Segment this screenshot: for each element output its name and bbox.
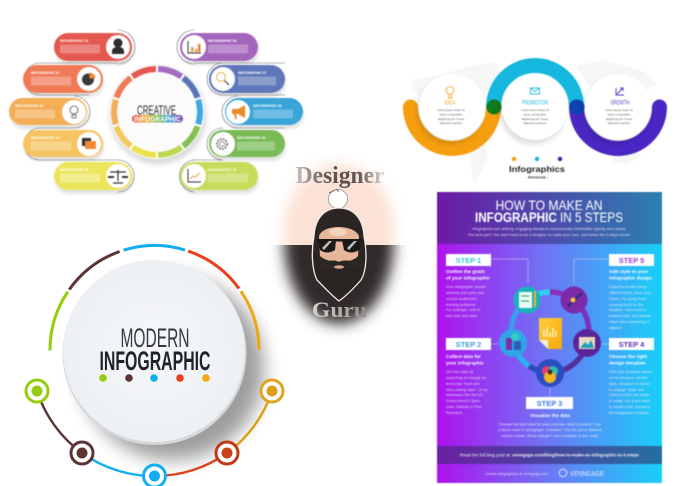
step 4 icon: [573, 329, 601, 357]
node: blue: [144, 465, 166, 486]
node: brown: [71, 442, 93, 464]
icon: bun: [328, 189, 348, 208]
step 5: Experiment with using: [609, 285, 646, 289]
step 2: Get free data by: [446, 370, 473, 374]
panel: ideas promotion growth: [410, 60, 660, 184]
intro text: Infographics use striking, engaging visuals to communicate information quickly and clearly.: [472, 226, 626, 231]
legend dots: [512, 157, 562, 161]
step 2 icon: [499, 329, 527, 357]
step 2: Research.: [446, 411, 463, 415]
upper arcs: [9, 204, 300, 486]
step 2: terms like "food and: [446, 382, 479, 386]
card: growth: dignissim pretium: [608, 121, 631, 125]
pill 07: [209, 65, 285, 93]
step 3: Visualize the data: [530, 413, 570, 419]
heading: guru: Guru: [312, 297, 367, 322]
step 2: Government's Open: [446, 399, 480, 403]
step 5: colors. Try using more: [609, 297, 646, 301]
ring shadow: [110, 68, 206, 164]
junction dots: [486, 100, 584, 114]
step 1: pair food and wine.: [446, 314, 478, 318]
step 4: to create a list, choose a: [609, 405, 651, 409]
title: infographic: INFOGRAPHIC: [100, 346, 210, 376]
pill 03: [9, 98, 87, 125]
card: promotion: Lorem ipsum dolor sit: [521, 108, 549, 112]
card: idea: Lorem ipsum dolor sit: [437, 108, 465, 112]
forehead highlight: [329, 228, 347, 236]
icon: scales: [108, 170, 128, 183]
pill 01: [54, 33, 132, 61]
step 2: databases like the US: [446, 393, 483, 397]
step 1: Outline the goals: [446, 269, 485, 275]
step 4: to adapt. So, if you want: [609, 399, 651, 403]
step 2: wine pairing data". Or try: [446, 388, 488, 392]
pill 06: [180, 33, 258, 61]
node: green: [26, 380, 48, 402]
heading: infographics elements: - Elements -: [526, 174, 549, 180]
disc: [62, 261, 246, 445]
icon: envelope: [530, 88, 540, 94]
step 5: Add style to your: [609, 269, 648, 275]
peach backdrop: [278, 159, 400, 245]
segmented color ring: [97, 52, 217, 172]
title: [475, 197, 623, 225]
connector lines: [24, 30, 285, 192]
icon: pie chart: [82, 72, 96, 86]
step 3: Choose the best chart for your purpose. Want to inform? Use: [499, 422, 601, 426]
icon: bearded head: [312, 208, 366, 301]
pill 08: INFOGRAPHIC 08: [253, 104, 282, 108]
card: promotion: PROMOTION: [522, 100, 548, 106]
step 2: STEP 2: [456, 340, 481, 349]
title: INFOGRAPHIC IN 5 STEPS: [475, 209, 623, 225]
step 4: Choose the right: [609, 354, 648, 360]
step 5: aligned.: [609, 326, 622, 330]
step 5: STEP 5: [619, 256, 644, 265]
step 4: style. Structure is harder: [609, 382, 651, 386]
step 5: different fonts, icons and: [609, 291, 650, 295]
pill 04: [23, 130, 103, 157]
step 3: a donut chart or pictograph. Compare? Try bar, pie or stacked: [498, 428, 602, 432]
step 1: Your infographic should: [446, 285, 486, 289]
disc shadow: [80, 276, 264, 460]
blue arc: [494, 66, 576, 107]
pill 10: INFOGRAPHIC 10: [208, 168, 237, 172]
card: growth: Lorem ipsum dolor sit: [605, 108, 633, 112]
step 4: to change. Style, like: [609, 388, 644, 392]
icon: speech bubbles: [82, 138, 96, 149]
sunglasses: [317, 239, 363, 252]
pill 02: [23, 65, 103, 93]
venngage credit: [485, 469, 604, 478]
card: growth: GROWTH: [610, 100, 630, 106]
pill 10: [180, 162, 258, 190]
title: HOW TO MAKE AN: [496, 197, 602, 213]
step 1: For example: how to: [446, 308, 480, 312]
step 5: infographic design: [609, 276, 652, 282]
rainbow label: INFOGRAPHIC: [134, 114, 182, 124]
heading: infographics elements: [509, 164, 565, 180]
pill 09: INFOGRAPHIC 09: [237, 136, 266, 140]
intro text: [468, 226, 630, 237]
icon: light bulb: [70, 106, 78, 118]
card: growth: [585, 74, 651, 140]
step 5: bulleted lists. And always: [609, 314, 651, 318]
document icon: [539, 318, 562, 349]
step 4: list infographic template.: [609, 411, 650, 415]
node: orange: [261, 380, 283, 402]
step 5: make sure everything is: [609, 320, 649, 324]
panel: modern infographic: [9, 204, 300, 486]
card: promotion: adipiscing elit. Fusce: [522, 117, 549, 121]
card: promotion: [502, 74, 568, 140]
circle shadows: [417, 78, 649, 144]
step 1: of your infographic: [446, 276, 490, 282]
background: [437, 192, 662, 483]
card: idea: dignissim pretium: [440, 121, 463, 125]
step 5 icon: [560, 286, 588, 314]
step 2: Data, Statista or Pew: [446, 405, 482, 409]
pill 05: INFOGRAPHIC 05: [60, 168, 89, 172]
step 2: Collect data for: [446, 354, 481, 360]
step 3: STEP 3: [537, 399, 562, 408]
card: promotion: dignissim pretium: [524, 121, 547, 125]
title: modern: MODERN: [120, 323, 190, 353]
step 5: unusual fonts for the: [609, 303, 643, 307]
icon: growth chart: [616, 88, 624, 95]
face: [319, 227, 359, 262]
card: promotion: amet, consectetur: [524, 112, 547, 116]
title: creative: CREATIVE: [137, 102, 176, 118]
pill 03: INFOGRAPHIC 03: [15, 104, 44, 108]
venngage credit: Create infographics at venngage.com: [485, 472, 548, 476]
header band: [437, 192, 662, 244]
disc top: [63, 260, 245, 442]
step 5: [609, 254, 654, 330]
ring: [511, 292, 589, 373]
step 3 icon: [536, 359, 564, 387]
pill 05: [54, 162, 132, 190]
pill shadows: [10, 37, 304, 194]
connectors: [491, 259, 609, 397]
pill 06: INFOGRAPHIC 06: [208, 39, 237, 43]
venngage credit: VENNGAGE: [570, 471, 604, 478]
panel: designer guru logo: [283, 156, 395, 324]
icon: bulb: [446, 87, 454, 98]
step 3: [498, 397, 602, 438]
world map: [412, 60, 657, 184]
step 4: design template: [609, 360, 646, 366]
color dots: [99, 374, 210, 382]
card: growth: amet, consectetur: [608, 112, 631, 116]
intro text: The best part? You don't need to be a designer to make your own. Just follow the 5 steps below:: [468, 232, 630, 237]
icon: megaphone: [232, 105, 245, 119]
step 4: STEP 4: [619, 340, 645, 349]
step 2: [446, 338, 491, 415]
panel: creative infographic: [9, 30, 304, 194]
card: idea: [419, 74, 485, 140]
pill 08: [225, 98, 303, 125]
step 2: searching on Google for: [446, 376, 487, 380]
heading: designer: Designer: [296, 163, 385, 189]
heading: infographics elements: Infographics: [509, 164, 565, 174]
icon: magnifier: [216, 72, 229, 85]
purple arc: [576, 107, 660, 148]
step 1: [446, 254, 491, 318]
orange arc: [410, 107, 494, 148]
pill 01: INFOGRAPHIC 01: [60, 39, 89, 43]
icon: gear: [217, 139, 227, 149]
step 3: column charts. Show change? Use a timeline or line chart.: [501, 434, 599, 438]
card: idea: adipiscing elit. Fusce: [438, 117, 465, 121]
moustache: [320, 261, 359, 269]
step 5: headers. Use icons in: [609, 308, 646, 312]
pill 02: INFOGRAPHIC 02: [31, 71, 60, 75]
step 4: [609, 338, 654, 415]
panel: how to make an infographic: [437, 192, 662, 483]
footer band: [437, 446, 662, 464]
card: idea: IDEA: [444, 100, 456, 106]
center disc: [110, 65, 204, 159]
dark backdrop: [272, 245, 406, 336]
pill 04: INFOGRAPHIC 04: [31, 136, 60, 140]
step 1: address and solve one: [446, 291, 484, 295]
step 1: of your audience's: [446, 297, 477, 301]
step 4: on its structure, not the: [609, 376, 648, 380]
step 1: STEP 1: [456, 256, 481, 265]
icon: line chart: [188, 169, 201, 182]
footer band: Read the full blog post at: venngage.com/blog/how-to-make-an-infographic-in-5-steps: [460, 452, 640, 458]
icon: bar chart: [188, 41, 201, 53]
step 1 icon: [514, 286, 540, 314]
node: red: [216, 442, 238, 464]
card: idea: amet, consectetur: [440, 112, 463, 116]
step 4: Pick your template based: [609, 370, 652, 374]
lip: [334, 265, 344, 269]
pill 07: INFOGRAPHIC 07: [238, 71, 267, 75]
icon: businessman: [112, 38, 124, 54]
step 4: colors or font, are easier: [609, 393, 651, 397]
pill 09: [209, 130, 285, 157]
step 1: burning problems.: [446, 303, 476, 307]
lower arcs: [37, 391, 272, 476]
card: growth: adipiscing elit. Fusce: [606, 117, 633, 121]
step 2: your infographic: [446, 360, 484, 366]
